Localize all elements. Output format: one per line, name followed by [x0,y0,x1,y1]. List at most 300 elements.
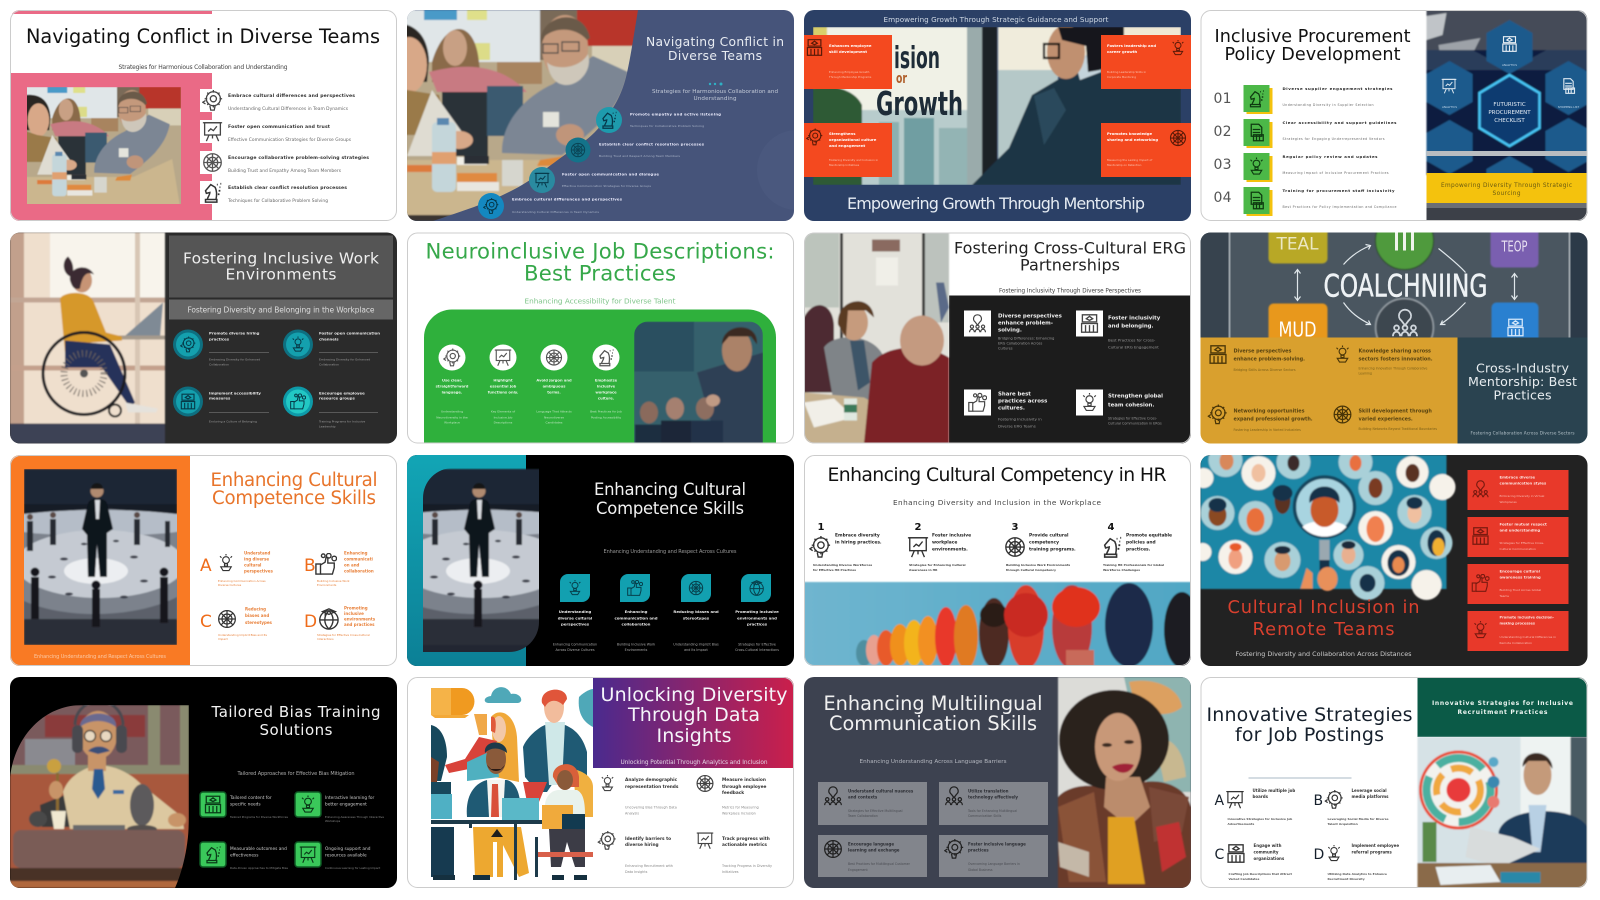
item B: media platforms [1352,794,1389,799]
step 4: Posting Accessibility [591,416,621,420]
item 1 [964,310,1062,350]
image: futuristic procurement checklist: PROCUREMENT [1488,110,1531,116]
item 4: Ongoing support and [325,846,371,852]
image: coaching chalkboard: TEAL [1276,234,1319,254]
panel: Enhances employee skill development: Enhancing Employee Growth [829,70,870,74]
card 3: learning and exchange [848,848,900,852]
item C: community [1254,850,1279,854]
item 2 [697,776,766,816]
item C: Engage with [1254,843,1282,848]
title panel: Unlocking Diversity [600,684,788,706]
step 3: competency [1029,540,1059,546]
subtitle band [169,300,393,320]
panel: Fosters leadership and career growth [1101,35,1191,89]
card 2: Cultural Communication [1500,547,1536,551]
item B [1314,788,1389,826]
title: Neuroinclusive Job Descriptions: [426,238,774,264]
card 2: Foster mutual respect [1500,522,1547,526]
step 4: Training HR Professionals for Global [1103,563,1164,567]
item 3: Enhancing Recruitment with [625,864,673,868]
divider [1248,778,1352,779]
step 2: 2 [915,522,922,533]
item D: Promoting [344,606,368,610]
step 2: Inclusive Job [494,416,512,420]
step 02: Clear accessibility and support guidelines [1282,120,1397,125]
image: coaching chalkboard: TEOP [1501,238,1528,256]
card 3: Building Trust Across Global [1500,588,1541,592]
item D: Interactions [317,637,334,641]
card 1: and contexts [848,794,878,800]
title: for Job Postings [1235,724,1384,746]
item C: stereotypes [245,620,273,625]
step 2: Foster inclusive [932,532,971,538]
item 1 [200,89,355,112]
item 2: and belonging. [1108,324,1154,330]
item A: perspectives [244,568,273,574]
title panel: Cross-Industry [1476,360,1570,376]
title: Fostering Cross-Cultural ERG [954,238,1186,258]
panel: Fosters leadership and career growth: career growth [1107,49,1138,54]
panel: Promotes knowledge sharing and networking [1101,123,1191,177]
item 2: Workplace Inclusion [722,812,756,816]
image: portraits and magnifier [1194,443,1456,600]
item 2: Foster inclusivity [1108,316,1161,322]
item 2: Enhancing Awareness Through Interactive [325,815,384,819]
title panel: Environments [226,266,336,284]
item 2: Best Practices for Cross- [1108,338,1156,342]
card 3: Encourage language [848,842,894,846]
item 2 [1076,310,1161,350]
card 4: Understanding Cultural Differences in [1500,635,1556,639]
card 1: Embrace diverse [1500,474,1536,480]
slide card: Enhancing Cultural Competence Skills (orange) [0,455,397,666]
item 3: Diverse ERG Teams [998,424,1036,428]
item B: Leveraging Social Media for Diverse [1328,817,1389,821]
image: coaching chalkboard: MUD [1278,318,1316,342]
caption: Enhancing Understanding and Respect Across Cultures [34,654,166,660]
item D: D [304,612,317,632]
step 1 [436,344,469,424]
item 2 [200,120,352,143]
step 2 [488,344,519,424]
title: Communication Skills [829,712,1037,735]
card 4 [1468,611,1568,651]
item 3 [200,151,369,174]
step 3: training programs. [1029,546,1076,552]
step 3: ambiguous [543,384,566,388]
step 4: culture. [598,396,615,400]
poster lettering: ision [894,41,940,76]
caption band: Sourcing [1492,191,1521,197]
title [426,238,774,286]
item 3: Fostering Leadership in Varied Industries [1234,428,1301,432]
title [824,692,1042,735]
poster lettering [877,45,962,116]
column 3 [673,574,719,652]
step 04 [1214,187,1397,216]
item 4: Understanding Cultural Differences in Team Dynamics [512,210,599,214]
card 1: Embracing Diversity in Virtual [1500,494,1544,498]
item 1: Promote empathy and active listening [630,112,721,116]
column 4 [735,574,779,652]
step 3: Neurodiverse [544,416,564,420]
card 1 [1468,470,1568,510]
step 4 [1103,522,1172,572]
step 3: 3 [1012,522,1019,533]
panel: Fosters leadership and career growth: Fosters leadership and [1107,43,1156,48]
subtitle: Strategies for Harmonious Collaboration and [652,89,778,95]
step 4 [590,344,622,420]
step 4: Emphasize [595,378,618,382]
item 4: Initiatives [722,870,739,874]
panel: Enhances employee skill development: Enhances employee [829,43,872,48]
item B: on and [344,562,360,568]
item 3 [200,842,289,870]
subtitle: Enhancing Understanding Across Language Barriers [860,759,1007,765]
step 2: essential job [490,384,517,388]
slide card: Neuroinclusive Job Descriptions [407,232,794,444]
column 2: collaboration [622,622,651,626]
item D: Implement employee [1352,843,1399,848]
item 4 [295,842,381,870]
item 3: Foster open communication and dialogue [562,172,659,176]
column 2: Building Inclusive Work [617,642,655,646]
item D [304,606,376,641]
photo: businessman on stage [0,469,225,645]
item 3: cultures. [998,406,1025,412]
item B: collaboration [344,568,374,574]
item 1: Tailored Programs for Diverse Workforces [229,815,289,819]
item 2: through employee [722,784,766,790]
item 3: Building Trust and Empathy Among Team Members [228,168,342,174]
title panel: Through Data [627,704,760,726]
card 4: practices [968,848,989,852]
item A: Innovative Strategies for Inclusive Job [1228,817,1293,821]
item 1: Tailored content for [229,795,272,801]
item D: environments [344,616,376,622]
column 4: environments and [737,616,777,620]
column 4: Promoting inclusive [735,609,779,614]
image: futuristic procurement checklist: FUTURISTIC [1493,102,1526,108]
panel: Promotes knowledge sharing and networking: Promotes knowledge [1107,131,1152,136]
step 1: Embrace diversity [835,532,880,538]
column 1: Across Diverse Cultures [555,648,595,652]
item 1 [173,330,269,366]
item D: and practices [344,622,375,627]
card 2 [1468,517,1568,557]
image: futuristic procurement checklist: ANALYTICS [1442,105,1457,109]
step 3 [1006,522,1076,572]
step 3: Provide cultural [1029,532,1069,538]
item D [1314,843,1399,881]
green heading panel [1418,677,1588,737]
step 3: through Cultural Competency [1006,568,1056,572]
step 1: language. [442,390,463,394]
item 2: better engagement [325,802,367,808]
title: Empowering Growth Through Mentorship [847,194,1145,213]
step 3: Language That Attracts [536,410,572,414]
item 2: Interactive learning for [325,795,375,801]
subtitle [652,89,778,102]
card 4: Remote Collaboration [1500,641,1532,645]
title panel [1458,338,1588,444]
item A: Diverse Cultures [218,583,242,587]
title panel: Fostering Inclusive Work [183,250,379,268]
title: Best Practices [524,260,676,286]
subtitle: Enhancing Accessibility for Diverse Talent [524,296,676,306]
item 2: Establish clear conflict resolution processes [599,142,705,146]
subtitle: Fostering Inclusivity Through Diverse Perspectives [999,288,1141,294]
title [1206,704,1412,746]
card 1: Team Collaboration [847,814,878,818]
item 2 [283,330,380,366]
subtitle: Fostering Diversity and Collaboration Across Distances [1236,650,1412,658]
step 1: 1 [818,522,825,533]
card 3: Engagement [848,868,869,872]
item 4: team cohesion. [1108,402,1154,408]
slide card: Tailored Bias Training Solutions [10,677,397,888]
title: Competence Skills [212,488,376,509]
card 2: and understanding [1500,528,1540,532]
item 2: sectors fosters innovation. [1358,356,1433,362]
green panel [424,310,776,444]
step 04: Training for procurement staff inclusivity [1282,188,1395,193]
card 1: Strategies for Effective Multilingual [848,809,903,813]
step 1: Understanding Diverse Workforces [813,563,872,567]
title [647,36,783,60]
item 2: Foster open communication and trust [228,124,331,130]
item C: Crafting Job Descriptions that Attract [1228,872,1292,876]
slide card: Unlocking Diversity Through Data Insights [407,677,794,888]
panel: Enhances employee skill development: skill development [829,49,867,54]
card 2: technology effectively [968,794,1018,800]
panel: Enhances employee skill development: Through Mentorship Programs [828,75,872,79]
item A [200,550,273,587]
image: futuristic procurement checklist [1426,10,1592,221]
item 1: enhance problem- [998,320,1053,326]
card 1: Workplaces [1500,500,1517,504]
item A: A [1214,793,1224,809]
item 1: Collaboration [209,362,229,366]
title panel: Fostering Collaboration Across Diverse Sectors [1470,430,1574,436]
item D: D [1314,847,1324,863]
title: Enhancing Cultural [594,480,746,499]
item 3: expand professional growth. [1234,416,1313,422]
step 4: policies and [1126,540,1156,546]
item 4 [1076,390,1163,426]
item 1: Embrace cultural differences and perspectives [228,93,355,99]
image: futuristic procurement checklist: CHECKLIST [1494,118,1525,124]
column 1: Understanding [559,609,591,614]
step 01: Understanding Diversity in Supplier Selection [1282,103,1374,107]
slide card: Inclusive Procurement Policy Development [1200,10,1592,221]
column 3: stereotypes [683,616,710,620]
title panel [169,236,393,298]
item 1 [1210,346,1305,372]
step 2 [908,522,971,572]
item C: organizations [1254,856,1285,861]
caption band [1426,173,1588,203]
photo: team meeting [27,87,181,204]
subtitle: Tailored Approaches for Effective Bias Mitigation [236,771,354,777]
title: Innovative Strategies [1206,704,1412,726]
step 04: Best Practices for Policy Implementation and Compliance [1282,205,1397,209]
item 1: enhance problem-solving. [1234,356,1305,362]
item A: Utilize multiple job [1252,788,1295,793]
item 4: Continuous Learning for Lasting Impact [325,866,381,870]
item 2: feedback [722,790,744,796]
item 3: Encourage collaborative problem-solving strategies [228,155,369,161]
step 2: Strategies for Enhancing Cultural [909,563,966,567]
step 2: environments. [932,546,968,552]
step 3: Building Inclusive Work Environments [1006,563,1070,567]
item C: C [200,612,212,632]
item 1: representation trends [625,784,679,790]
step 2: Key Elements of [491,410,516,414]
item 3: Enduring a Culture of Belonging [209,420,257,424]
panel: gold benefits [1200,338,1458,444]
item A: Advertisements [1228,822,1254,826]
title [210,703,380,739]
title [1214,27,1411,65]
item 4: resources available [325,852,367,858]
slide card: Enhancing Cultural Competency in HR [804,455,1200,669]
step 4: practices. [1126,546,1151,552]
item 3 [1208,404,1313,432]
item 1 [596,107,721,133]
title: Navigating Conflict in Diverse Teams [26,25,380,48]
column 4: practices [747,622,768,626]
step 3 [536,344,572,424]
step 2: Descriptions [494,420,513,424]
photo: woman in wheelchair at desk [10,232,165,444]
panel: Strengthens organizational culture and engagement: Fostering Diversity and Inclusion in [829,158,878,162]
step 01: 01 [1214,91,1232,107]
column 3: and Its Impact [684,648,709,652]
title: Diverse Teams [668,49,762,63]
step 3: Avoid jargon and [536,378,572,382]
item 3: Implement accessibility [209,390,261,396]
item B: Talent Acquisition [1328,822,1358,826]
item 1: Analyze demographic [625,777,678,783]
item 2: Enhancing Innovation Through Collaborative [1358,366,1427,370]
item 4: Strengthen global [1108,394,1163,400]
subtitle: Understanding [694,96,737,102]
panel: Promotes knowledge sharing and networking: Measuring the Lasting Impact of [1107,158,1153,162]
item C: biases and [245,613,269,618]
pagination dots [709,82,722,86]
column 1: diverse cultural [558,616,592,620]
card 2: Utilize translation [968,788,1009,794]
photo: two colleagues at table [804,232,949,444]
item 1: ERG Collaboration Across [998,342,1042,346]
title: Partnerships [1020,256,1120,274]
item 1: Bridging Skills Across Diverse Sectors [1234,368,1296,372]
step 1: for Effective HR Practices [813,568,856,572]
step 2: Awareness in HR [909,568,938,572]
photo: man with tablet and circular chart [1418,737,1588,888]
step 4: Best Practices for Job [590,410,622,414]
image: coaching chalkboard: COALCHNIING [1324,268,1488,304]
item D: inclusive [344,611,364,616]
step 2: functions only. [488,390,519,394]
title: Tailored Bias Training [210,703,380,721]
title: Solutions [260,721,333,739]
item 4: Training Programs for Inclusive [318,420,365,424]
card 1 [818,782,927,825]
item 4: Tracking Progress in Diversity [721,864,772,868]
item A: A [200,556,212,576]
column 1 [553,574,597,652]
item 4: Track progress with [722,836,770,842]
panel: Promotes knowledge sharing and networking: sharing and networking [1107,137,1158,142]
item C: Impact [218,637,229,641]
card 3: Encourage cultural [1500,568,1540,574]
photo: businessman on stage [357,469,607,655]
image: clay figure with microphone [10,701,189,888]
item 1: Bridging Differences: Enhancing [998,336,1054,340]
item 2: Collaboration [319,362,339,366]
step 1: Understanding [441,410,463,414]
item 2: Measure inclusion [722,777,766,783]
green heading panel: Innovative Strategies for Inclusive [1432,700,1573,707]
item 3: diverse hiring [625,842,659,848]
card 2 [939,782,1048,825]
card 3 [1468,564,1568,604]
card 3: awareness training [1500,574,1541,580]
card 4: making processes [1500,622,1535,626]
photo: team meeting [407,10,638,221]
item 3: Effective Communication Strategies for Diverse Groups [562,184,651,188]
step 4: Workforce Challenges [1103,568,1140,572]
item 4: Establish clear conflict resolution processes [228,185,347,191]
step 03: 03 [1214,157,1232,173]
item D: referral programs [1352,850,1392,854]
title: Competence Skills [596,499,744,518]
panel: Enhances employee skill development [804,35,892,89]
title panel: Practices [1494,388,1552,402]
item 1: specific needs [230,802,261,808]
item C [200,606,273,641]
item 3: Data-Driven Approaches to Mitigate Bias [230,866,289,870]
item 1: Understanding Cultural Differences in Team Dynamics [228,106,349,112]
panel: Strengthens organizational culture and engagement: organizational culture [829,137,877,142]
card 1: communication styles [1500,480,1547,486]
panel: Fosters leadership and career growth: Building Leadership Skills in [1107,70,1146,74]
title: Navigating Conflict in [646,35,784,49]
step 02: 02 [1214,124,1232,140]
item 1 [602,775,679,816]
item A: boards [1252,794,1269,799]
item 3: effectiveness [230,852,259,858]
column 2 [614,574,658,652]
title [954,238,1186,274]
card 2: Strategies for Effective Cross- [1500,541,1544,545]
card 1: Understand cultural nuances [848,788,914,794]
column 2: Environments [625,648,648,652]
image: coaching chalkboard [1200,212,1588,356]
slide card: Fostering Inclusive Work Environments [10,232,397,444]
card 3 [818,835,927,877]
item 3: Data Insights [625,870,648,874]
image: futuristic procurement checklist: ANALYTICS [1502,63,1517,67]
photo: business people pointing [634,322,763,444]
item 2: Effective Communication Strategies for Diverse Groups [228,137,352,143]
subtitle: Strategies for Harmonious Collaboration and Understanding [118,64,288,71]
column 4: Cross-Cultural Interactions [735,648,779,652]
chalk arrows [1294,244,1518,324]
column 2: communication and [614,616,658,620]
